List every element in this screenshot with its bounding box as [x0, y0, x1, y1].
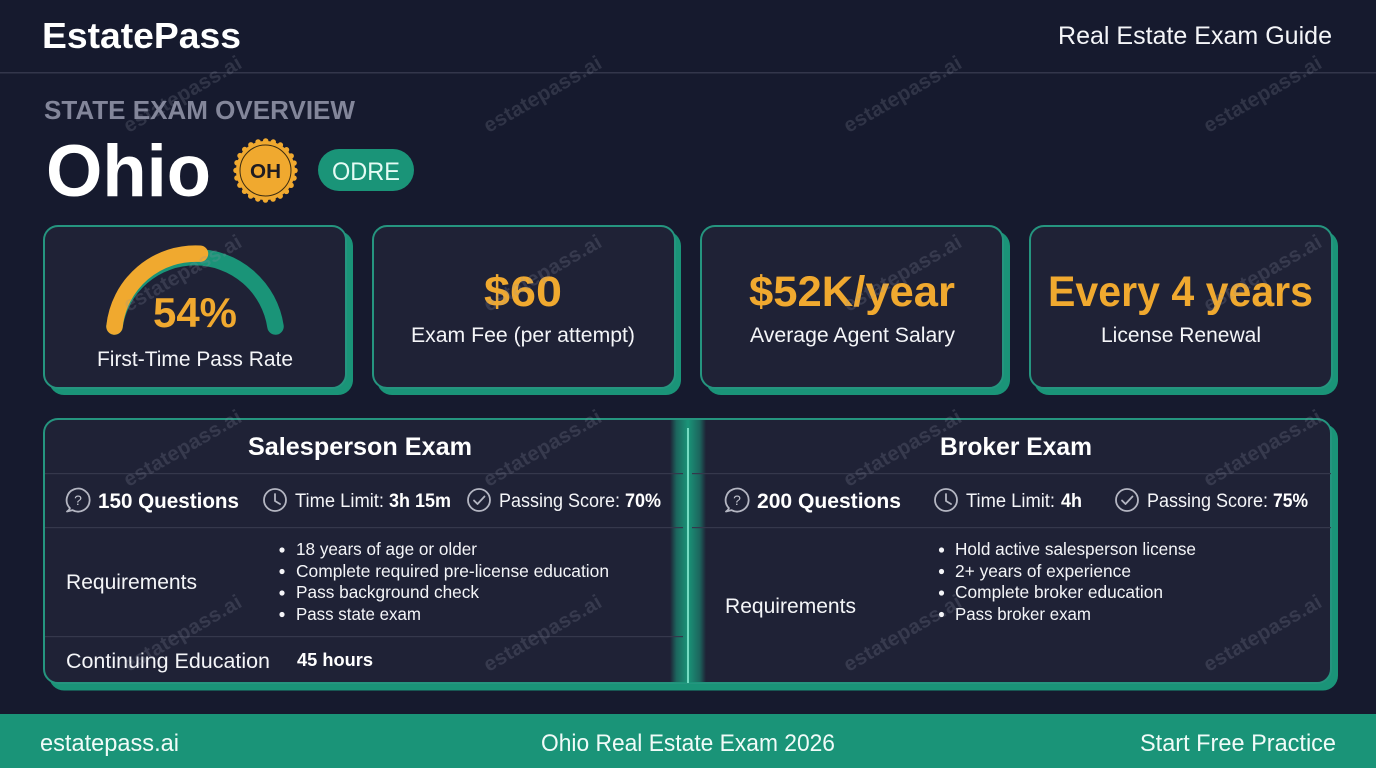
question count: 150 Questions [98, 490, 239, 513]
header guide title: Real Estate Exam Guide [1058, 22, 1332, 50]
requirements list: Pass state exam [296, 604, 421, 624]
gauge chart [114, 254, 276, 326]
requirements list: Hold active salesperson license [955, 539, 1196, 559]
stat card: salary [701, 226, 1010, 395]
requirements list: Complete required pre-license education [296, 561, 609, 581]
overline label: STATE EXAM OVERVIEW [44, 95, 355, 125]
continuing education label: Continuing Education [66, 650, 270, 673]
footer call to action: Start Free Practice [1140, 730, 1336, 757]
pass rate value: 54% [153, 289, 237, 336]
stat card: pass rate [44, 226, 353, 395]
time limit [295, 491, 451, 512]
continuing education hours: 45 hours [297, 649, 373, 670]
requirements list [939, 539, 1196, 624]
requirements label: Requirements [725, 595, 856, 618]
passing score: Passing Score: [1147, 491, 1268, 512]
time limit: 3h 15m [389, 491, 451, 512]
time limit: Time Limit: [966, 491, 1055, 512]
header bar [0, 15, 1376, 74]
salesperson exam column [66, 433, 661, 673]
watermarks: estatepass.ai [1200, 590, 1326, 677]
icon: state seal badge: OH [250, 161, 281, 183]
salary label: Average Agent Salary [750, 324, 955, 347]
glowing divider [670, 420, 706, 683]
passing score: 75% [1273, 491, 1308, 512]
icon: question bubble: ? [733, 492, 741, 508]
stat card: exam fee [373, 226, 681, 395]
time limit: Time Limit: [295, 491, 384, 512]
watermarks: estatepass.ai [480, 230, 606, 317]
requirements list [279, 539, 609, 624]
requirements list: Pass background check [296, 582, 479, 602]
watermarks: estatepass.ai [840, 405, 966, 492]
watermarks: estatepass.ai [840, 51, 966, 138]
watermarks: estatepass.ai [1200, 405, 1326, 492]
icon: clock [264, 489, 286, 511]
watermarks: estatepass.ai [480, 590, 606, 677]
footer bar [0, 714, 1376, 768]
passing score: 70% [625, 491, 661, 512]
watermarks: estatepass.ai [1200, 51, 1326, 138]
passing score: Passing Score: [499, 491, 620, 512]
watermarks: estatepass.ai [120, 230, 246, 317]
state title section [44, 95, 414, 212]
watermarks: estatepass.ai [840, 230, 966, 317]
agency pill: ODRE [332, 158, 400, 186]
requirements list: Pass broker exam [955, 604, 1091, 624]
watermarks: estatepass.ai [480, 51, 606, 138]
fee label: Exam Fee (per attempt) [411, 324, 635, 347]
footer site name: estatepass.ai [40, 730, 179, 757]
icon: question bubble [67, 489, 90, 512]
renewal label: License Renewal [1101, 324, 1261, 347]
icon: question bubble: ? [74, 492, 82, 508]
pass rate label: First-Time Pass Rate [97, 348, 293, 371]
stat card: renewal [1030, 226, 1338, 395]
watermarks: estatepass.ai [120, 590, 246, 677]
watermarks: estatepass.ai [1200, 230, 1326, 317]
requirements list: Complete broker education [955, 582, 1163, 602]
footer title: Ohio Real Estate Exam 2026 [541, 730, 835, 757]
fee value: $60 [484, 268, 562, 316]
icon: check circle [1116, 489, 1138, 511]
agency pill [318, 149, 414, 191]
watermarks: estatepass.ai [480, 405, 606, 492]
watermarks: estatepass.ai [120, 51, 246, 138]
icon: clock [935, 489, 957, 511]
brand logo text: EstatePass [42, 15, 241, 56]
question count: 200 Questions [757, 490, 901, 513]
watermarks: estatepass.ai [840, 590, 966, 677]
icon: state seal badge [236, 141, 295, 200]
requirements list: 2+ years of experience [955, 561, 1131, 581]
exam comparison panel [44, 419, 1338, 690]
state name: Ohio [46, 131, 211, 212]
requirements list: 18 years of age or older [296, 539, 477, 559]
requirements label: Requirements [66, 571, 197, 594]
icon: check circle [468, 489, 490, 511]
salary value: $52K/year [749, 268, 955, 316]
broker heading: Broker Exam [940, 433, 1092, 461]
time limit: 4h [1061, 491, 1082, 512]
icon: question bubble [726, 489, 749, 512]
renewal value: Every 4 years [1048, 268, 1313, 316]
watermarks [120, 51, 1326, 677]
watermarks: estatepass.ai [120, 405, 246, 492]
broker exam column [725, 433, 1308, 624]
salesperson heading: Salesperson Exam [248, 433, 472, 461]
